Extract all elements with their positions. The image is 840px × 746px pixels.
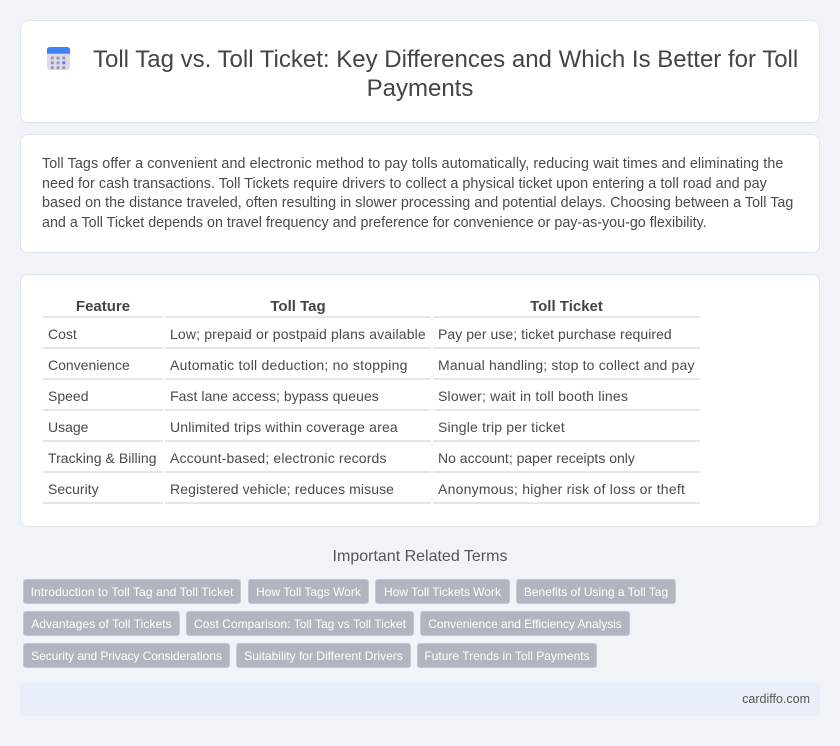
row: convenience: Automatic toll deduction; no stopping: [170, 357, 408, 373]
panel: summary text: [20, 134, 820, 253]
table header: Toll Ticket: [530, 298, 603, 315]
table header: [43, 298, 700, 318]
tag: How Toll Tags Work: [256, 585, 361, 599]
tag: [516, 579, 676, 604]
row: security: [43, 481, 700, 504]
table header: Toll Tag: [270, 298, 326, 315]
tag: [23, 611, 180, 636]
row: security: Anonymous; higher risk of loss or theft: [438, 481, 685, 497]
tag: Cost Comparison: Toll Tag vs Toll Ticket: [194, 617, 406, 631]
row: cost: Pay per use; ticket purchase required: [438, 326, 672, 342]
row: cost: [43, 326, 700, 349]
summary paragraph: [42, 156, 793, 230]
tag: How Toll Tickets Work: [384, 585, 501, 599]
row: convenience: Manual handling; stop to collect and pay: [438, 357, 695, 373]
row: speed: Fast lane access; bypass queues: [170, 388, 379, 404]
tag: Advantages of Toll Tickets: [31, 617, 172, 631]
row: tracking and billing: Tracking & Billing: [48, 450, 157, 466]
tag: Convenience and Efficiency Analysis: [428, 617, 622, 631]
table header: Feature: [76, 298, 130, 315]
tag: [23, 643, 230, 668]
row: speed: Slower; wait in toll booth lines: [438, 388, 628, 404]
summary paragraph: based on the distance traveled, often resulting in slower processing and potential delays. Choosing between a Toll Tag: [42, 195, 793, 211]
panel: title card: [20, 20, 820, 123]
tag: Introduction to Toll Tag and Toll Ticket: [31, 585, 233, 599]
related terms tags: [23, 579, 676, 668]
tag: Security and Privacy Considerations: [31, 649, 222, 663]
tag: Benefits of Using a Toll Tag: [524, 585, 668, 599]
tag: Future Trends in Toll Payments: [424, 649, 590, 663]
row: tracking and billing: No account; paper receipts only: [438, 450, 635, 466]
footer bar: [20, 682, 820, 716]
footer credit: cardiffo.com: [742, 692, 810, 706]
comparison table: [43, 298, 700, 504]
related terms heading: Important Related Terms: [333, 548, 507, 565]
tag: [375, 579, 510, 604]
row: cost: Low; prepaid or postpaid plans available: [170, 326, 426, 342]
title: Payments: [367, 75, 473, 102]
summary paragraph: Toll Tags offer a convenient and electronic method to pay tolls automatically, reducing wait times and eliminating the: [42, 156, 783, 172]
title: [93, 46, 798, 102]
tag: [186, 611, 414, 636]
row: security: Security: [48, 481, 99, 497]
row: usage: [43, 419, 700, 442]
tag: Suitability for Different Drivers: [244, 649, 403, 663]
row: tracking and billing: Account-based; electronic records: [170, 450, 387, 466]
row: cost: Cost: [48, 326, 77, 342]
tag: [420, 611, 630, 636]
row: speed: [43, 388, 700, 411]
icon: calendar: [46, 47, 70, 70]
tag: [248, 579, 369, 604]
summary paragraph: and a Toll Ticket depends on travel frequency and preference for convenience or pay-as-you-go flexibility.: [42, 214, 707, 230]
row: security: Registered vehicle; reduces misuse: [170, 481, 394, 497]
row: convenience: [43, 357, 700, 380]
summary paragraph: need for cash transactions. Toll Tickets require drivers to collect a physical ticket upon entering a toll road and pay: [42, 176, 767, 192]
row: usage: Single trip per ticket: [438, 419, 565, 435]
panel: comparison table: [20, 274, 820, 527]
tag: [23, 579, 241, 604]
row: speed: Speed: [48, 388, 88, 404]
row: tracking and billing: [43, 450, 700, 473]
row: usage: Usage: [48, 419, 88, 435]
tag: [236, 643, 411, 668]
row: usage: Unlimited trips within coverage area: [170, 419, 398, 435]
row: convenience: Convenience: [48, 357, 130, 373]
title: Toll Tag vs. Toll Ticket: Key Differences and Which Is Better for Toll: [93, 46, 798, 73]
tag: [417, 643, 597, 668]
